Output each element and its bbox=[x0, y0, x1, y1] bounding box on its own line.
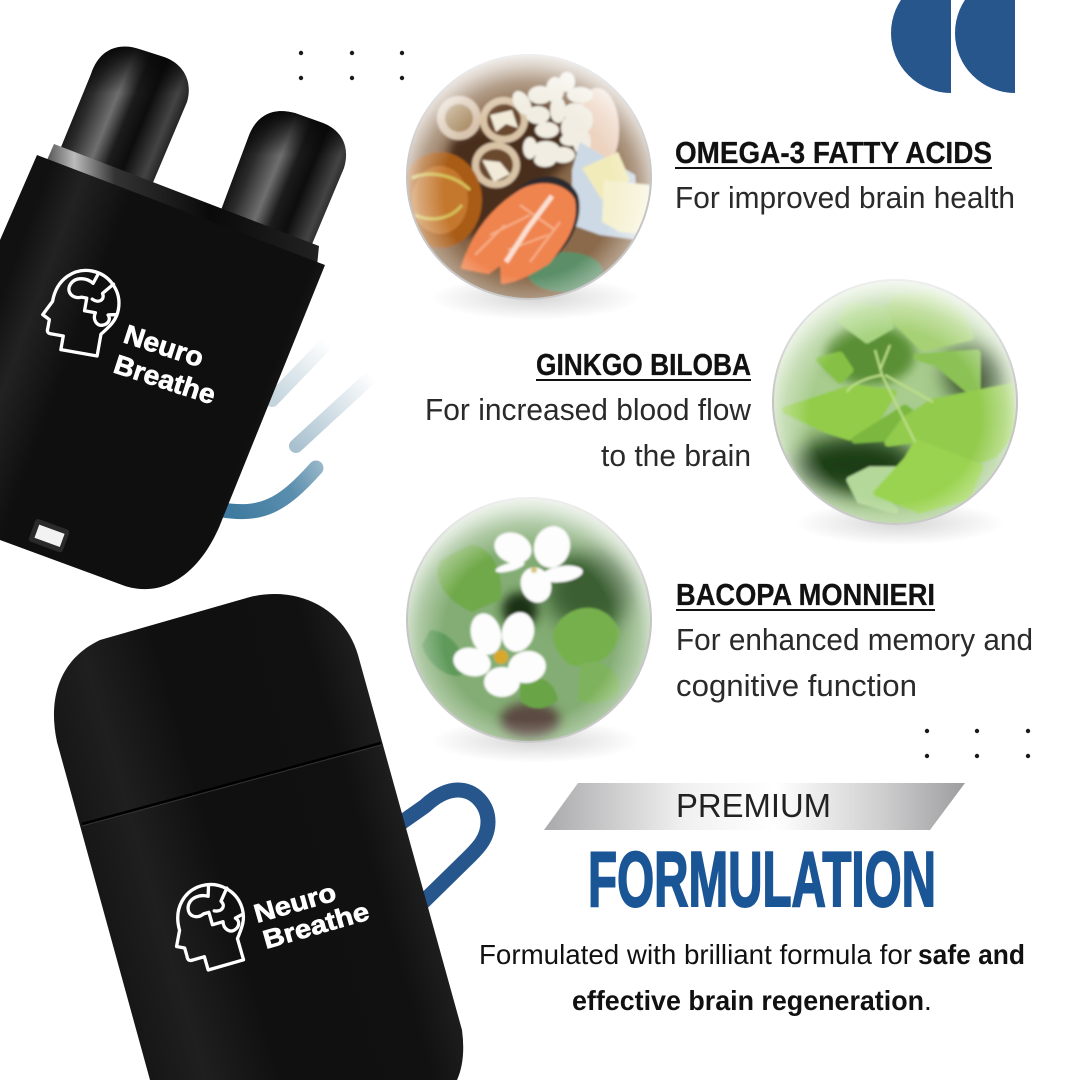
logo text: Neuro Breathe: Neuro bbox=[120, 319, 207, 373]
paper bbox=[572, 142, 640, 240]
blue loop behind bottom device bbox=[398, 790, 488, 905]
butter bbox=[582, 152, 630, 200]
logo text: Neuro Breathe: Breathe bbox=[110, 349, 219, 410]
ingredient text: ginkgo biloba bbox=[425, 347, 752, 473]
logo icon: brain puzzle head bbox=[37, 264, 124, 358]
dot grid top bbox=[299, 51, 404, 80]
ingredient text: ginkgo biloba: GINKGO BILOBA bbox=[536, 347, 751, 382]
flowers bbox=[450, 522, 584, 697]
device body bbox=[54, 594, 463, 1080]
sphere: bacopa monnieri bbox=[400, 490, 660, 763]
pumpkin seeds bbox=[509, 72, 593, 167]
nasal tip left bbox=[59, 47, 189, 192]
logo text: Neuro Breathe bbox=[250, 877, 372, 955]
description text: effective brain regeneration bbox=[572, 985, 924, 1016]
bottom device: closed inhaler bbox=[54, 594, 463, 1080]
collar bbox=[47, 144, 319, 266]
decorative blue double half circles bbox=[891, 0, 1015, 93]
sphere shadow bbox=[795, 501, 1005, 545]
sphere: ginkgo biloba bbox=[770, 279, 1020, 545]
glass vignette bbox=[406, 54, 652, 300]
nasal tip right bbox=[218, 111, 346, 249]
salmon skin bbox=[512, 176, 581, 257]
sphere shadow bbox=[430, 276, 640, 320]
top device: open inhaler bbox=[0, 47, 346, 589]
glass rim bbox=[407, 498, 651, 742]
faded blue arc strokes behind top device bbox=[222, 345, 372, 512]
glass rim bbox=[773, 280, 1017, 524]
logo text: Neuro Breathe bbox=[110, 319, 219, 410]
glass rim bbox=[407, 55, 651, 299]
ingredient text: ginkgo biloba: For increased blood flow bbox=[425, 392, 752, 427]
glass vignette bbox=[772, 279, 1018, 525]
cap seam bbox=[82, 743, 381, 824]
description text: safe and bbox=[918, 939, 1025, 970]
ingredient text: omega-3 bbox=[675, 135, 1015, 215]
ginkgo leaves bbox=[785, 293, 1013, 510]
logo text: Neuro Breathe: Neuro bbox=[250, 877, 339, 929]
ingredient text: omega-3: OMEGA-3 FATTY ACIDS bbox=[675, 135, 992, 170]
logo text: Neuro Breathe: Breathe bbox=[259, 896, 372, 955]
device body bbox=[0, 155, 325, 589]
ingredient text: bacopa monnieri: BACOPA MONNIERI bbox=[676, 577, 935, 612]
sphere shadow bbox=[430, 719, 640, 763]
glass vignette bbox=[406, 497, 652, 743]
description text: Formulated with brilliant formula for bbox=[479, 939, 912, 970]
ingredient text: bacopa monnieri bbox=[676, 577, 1033, 703]
olive oil bottle bbox=[398, 152, 482, 248]
premium banner: PREMIUM bbox=[676, 787, 831, 824]
description text bbox=[479, 939, 1025, 1016]
green seaweed bbox=[527, 252, 603, 292]
usb port bbox=[28, 518, 70, 553]
walnuts bbox=[437, 96, 528, 188]
ingredient text: omega-3: For improved brain health bbox=[675, 180, 1015, 215]
leaf stems bbox=[847, 345, 933, 442]
ingredient text: bacopa monnieri: For enhanced memory and bbox=[676, 622, 1033, 657]
ingredient text: bacopa monnieri: cognitive function bbox=[676, 668, 917, 703]
salmon steak bbox=[463, 185, 574, 282]
green leaves bbox=[422, 545, 620, 708]
dot grid bottom bbox=[925, 729, 1030, 758]
ingredient text: ginkgo biloba: to the brain bbox=[601, 438, 751, 473]
description text: . bbox=[924, 985, 932, 1016]
premium banner bbox=[544, 783, 965, 830]
egg bbox=[578, 87, 620, 158]
sphere: omega-3 foods bbox=[398, 50, 660, 320]
logo icon: brain puzzle head bbox=[162, 877, 256, 977]
